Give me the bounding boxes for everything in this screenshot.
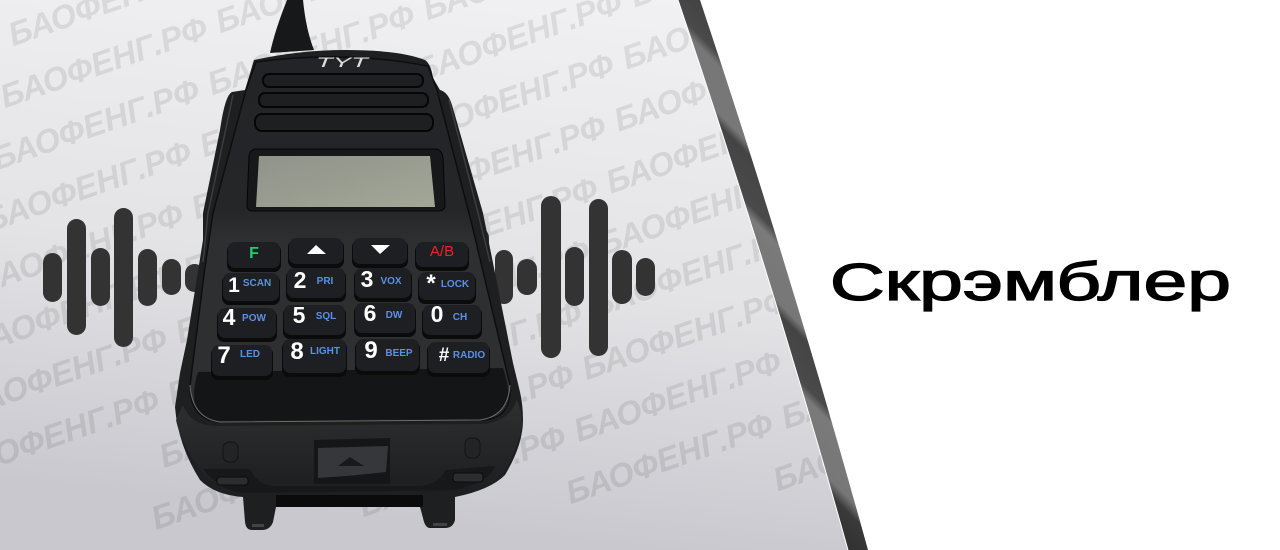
number labels: SQL <box>316 311 336 322</box>
side grip lines <box>203 95 490 262</box>
battery latch <box>314 438 390 484</box>
watermark pattern: БАОФЕНГ.РФ <box>808 81 1025 188</box>
watermark pattern: БАОФЕНГ.РФ <box>816 19 1033 126</box>
speaker slots <box>255 74 433 131</box>
number labels: * <box>426 270 436 297</box>
number labels: RADIO <box>453 350 485 361</box>
number labels: 5 <box>293 302 306 328</box>
function key labels: A/B <box>430 243 454 260</box>
watermark pattern: БАОФЕНГ.РФ <box>378 231 595 338</box>
diagonal striped band <box>678 0 868 550</box>
number labels <box>217 266 485 369</box>
number labels: 8 <box>290 338 304 365</box>
number labels: LED <box>240 349 260 360</box>
watermark pattern: БАОФЕНГ.РФ <box>569 343 786 449</box>
watermark pattern: БАОФЕНГ.РФ <box>186 120 403 226</box>
watermark pattern: БАОФЕНГ.РФ <box>601 94 818 201</box>
watermark pattern: БАОФЕНГ.РФ <box>792 206 1009 312</box>
icon: sound wave left <box>43 208 204 347</box>
keypad base <box>194 368 508 421</box>
number labels: BEEP <box>385 348 413 359</box>
number labels: PRI <box>317 276 334 287</box>
watermark pattern: БАОФЕНГ.РФ <box>593 156 810 263</box>
LCD screen <box>247 149 445 211</box>
watermark pattern: БАОФЕНГ.РФ <box>162 306 379 413</box>
watermark pattern: БАОФЕНГ.РФ <box>800 143 1017 250</box>
radio handset <box>175 0 523 530</box>
watermark pattern: БАОФЕНГ.РФ <box>776 330 993 436</box>
watermark pattern: БАОФЕНГ.РФ <box>561 405 778 511</box>
watermark pattern: БАОФЕНГ.РФ <box>361 356 579 462</box>
number labels: LOCK <box>441 279 470 290</box>
watermark pattern <box>0 0 826 530</box>
keypad <box>211 238 490 380</box>
watermark pattern: БАОФЕНГ.РФ <box>178 182 395 288</box>
antenna <box>270 0 314 53</box>
watermark pattern: БАОФЕНГ.РФ <box>353 418 570 524</box>
watermark pattern: БАОФЕНГ.РФ <box>394 107 611 213</box>
number labels: 9 <box>364 337 378 364</box>
lower details <box>203 438 495 527</box>
lower housing <box>176 400 522 493</box>
watermark pattern: БАОФЕНГ.РФ <box>768 392 985 498</box>
number labels: SCAN <box>243 278 271 289</box>
number labels: 2 <box>294 267 306 293</box>
watermark pattern: БАОФЕНГ.РФ <box>577 281 794 387</box>
watermark pattern: БАОФЕНГ.РФ <box>146 431 363 537</box>
number labels: # <box>439 345 450 366</box>
watermark pattern: БАОФЕНГ.РФ <box>154 368 371 475</box>
background panel <box>0 0 848 550</box>
watermark pattern: БАОФЕНГ.РФ <box>0 9 212 115</box>
silver trim <box>190 385 510 422</box>
watermark pattern: БАОФЕНГ.РФ <box>194 58 411 164</box>
icon: sound wave right <box>470 196 655 358</box>
watermark pattern: БАОФЕНГ.РФ <box>370 293 587 400</box>
number labels: CH <box>453 312 467 323</box>
number labels: VOX <box>380 276 402 287</box>
number labels: POW <box>242 313 267 324</box>
watermark pattern: БАОФЕНГ.РФ <box>402 45 619 151</box>
radio face plate <box>190 57 510 422</box>
number labels: 1 <box>228 274 240 297</box>
watermark pattern: БАОФЕНГ.РФ <box>170 244 387 351</box>
number labels: DW <box>386 310 403 321</box>
number labels: 4 <box>223 304 236 330</box>
number labels: 0 <box>431 301 443 327</box>
function key labels: F <box>249 245 259 262</box>
watermark pattern: БАОФЕНГ.РФ <box>784 268 1001 374</box>
watermark pattern: БАОФЕНГ.РФ <box>386 169 603 276</box>
number labels: 6 <box>364 300 376 326</box>
number labels: 3 <box>361 266 373 292</box>
function key labels <box>249 243 454 262</box>
watermark pattern: БАОФЕНГ.РФ <box>609 32 826 138</box>
number labels: 7 <box>217 342 231 369</box>
number labels: LIGHT <box>310 346 340 357</box>
radio body silhouette <box>175 50 523 530</box>
TYT logo: TYT <box>316 54 371 70</box>
title: С крэмблер <box>830 252 1231 312</box>
watermark pattern: БАОФЕНГ.РФ <box>585 218 802 325</box>
